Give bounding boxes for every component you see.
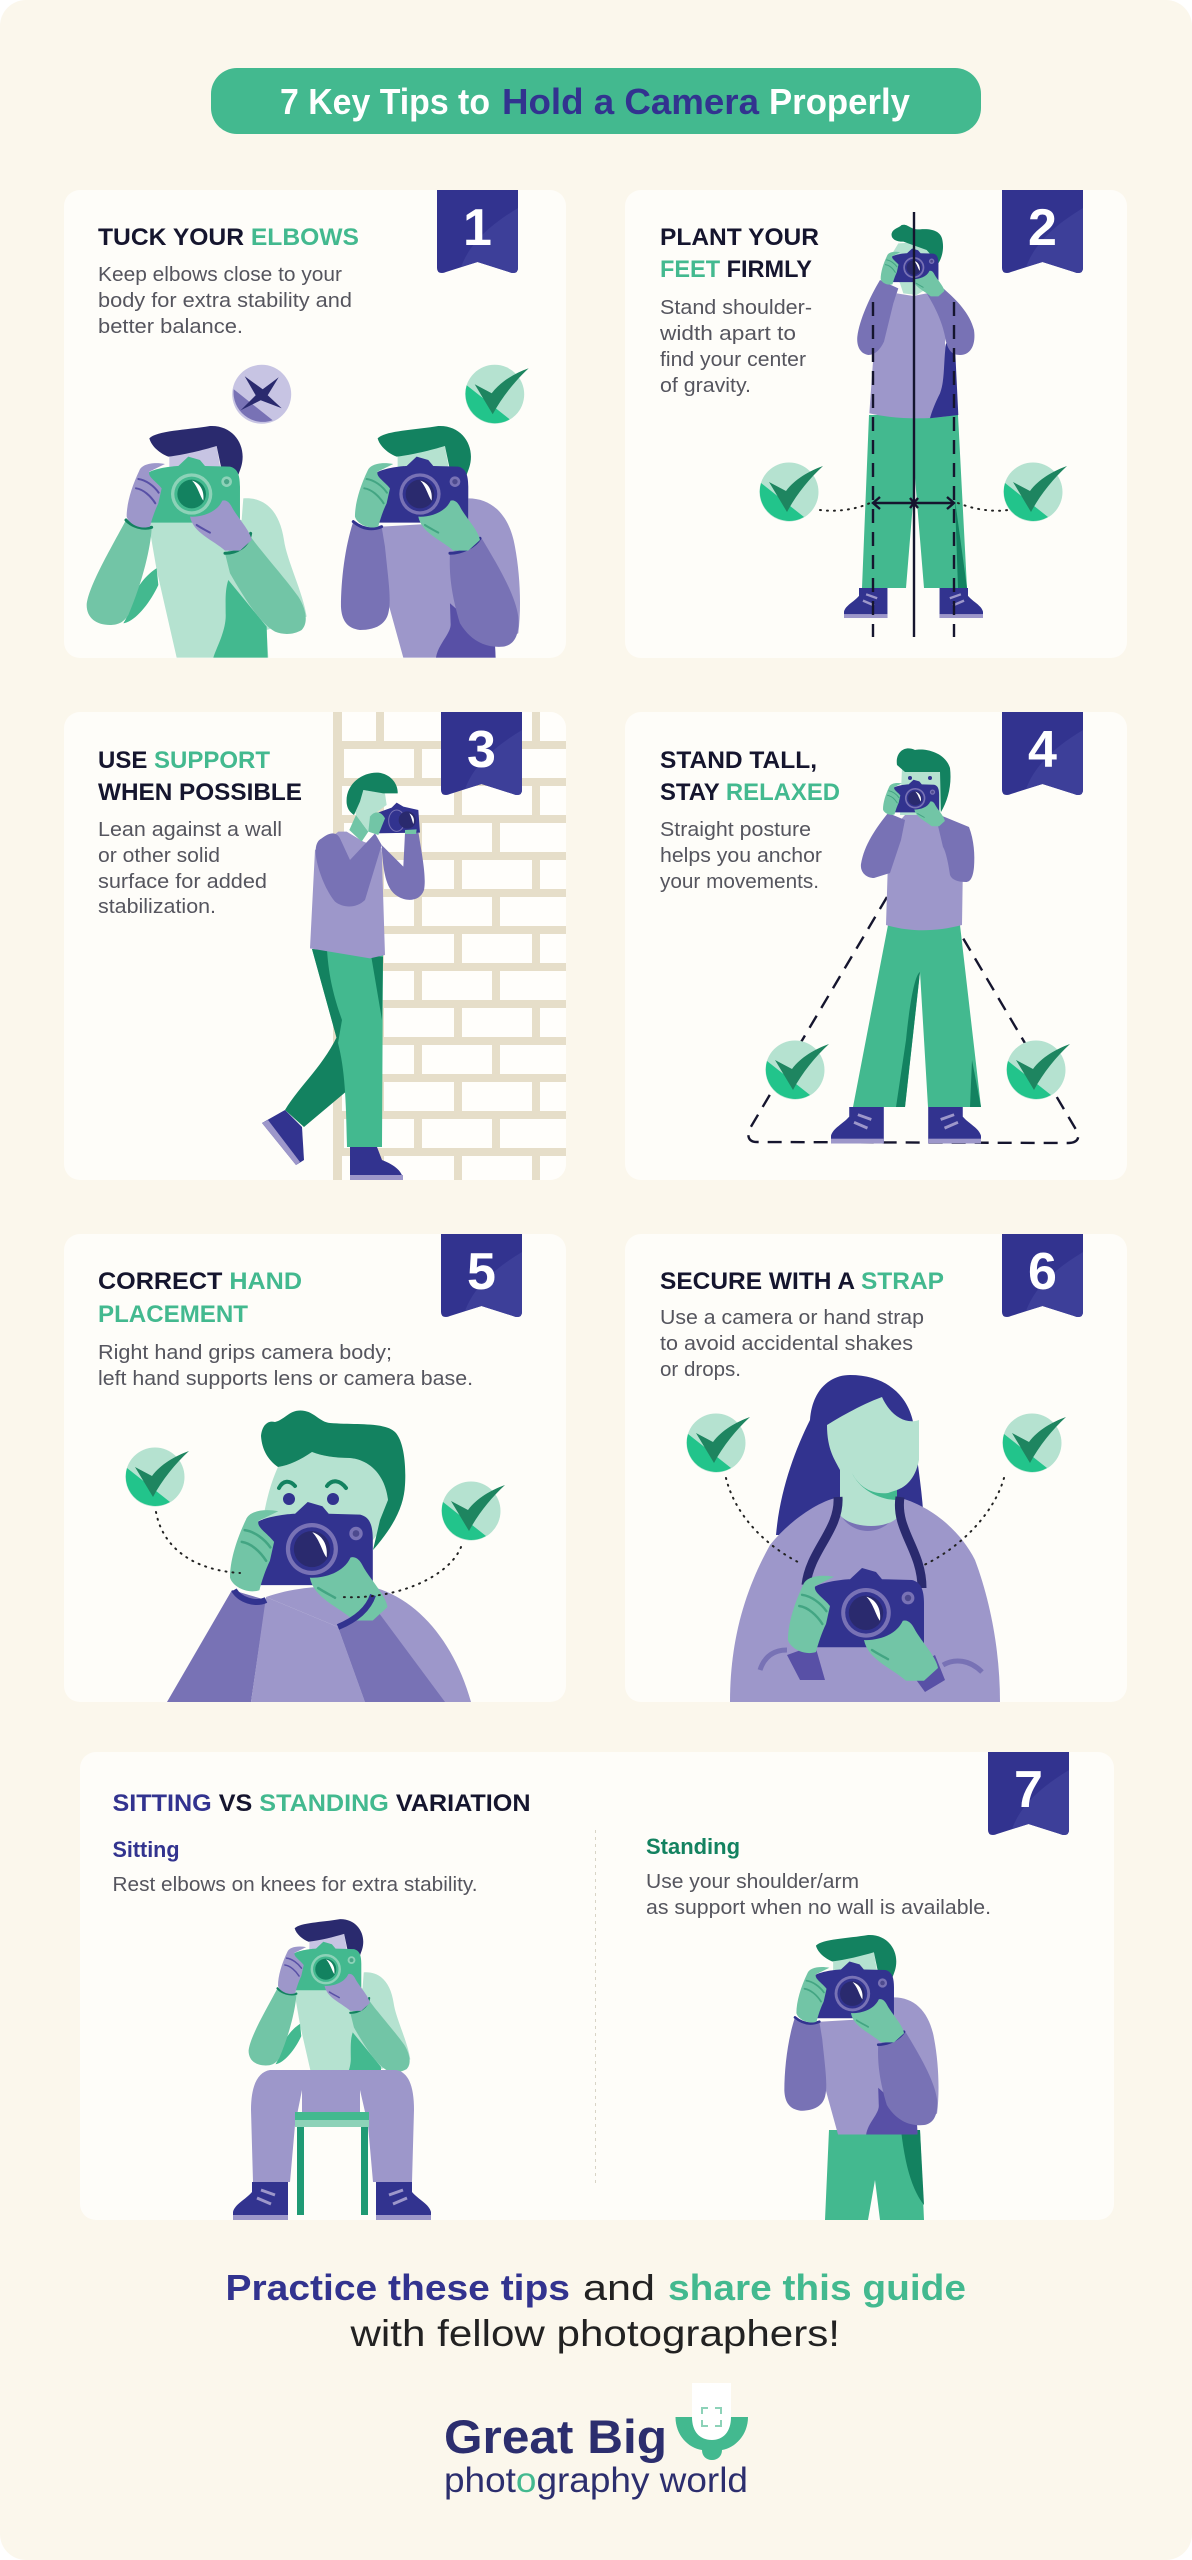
number ribbon 2: 2 <box>1028 199 1057 257</box>
footer call to action: and <box>583 2267 655 2308</box>
heading: PLACEMENT <box>98 1301 248 1328</box>
title banner <box>211 68 981 134</box>
icon: check left <box>760 462 823 522</box>
number ribbon 1: 1 <box>463 199 492 257</box>
sitting column text <box>112 1837 478 1896</box>
footer call to action: Practice these tips <box>226 2267 570 2308</box>
figure: standing front view <box>844 225 983 618</box>
center line and dashed guides <box>873 212 954 637</box>
heading: SITTING VS STANDING VARIATION <box>112 1790 530 1817</box>
dotted connectors <box>726 1478 1004 1565</box>
icon: check mark <box>465 365 529 424</box>
number ribbon 7: 7 <box>1014 1761 1043 1819</box>
icon: check left <box>686 1414 750 1472</box>
icon: check left <box>126 1448 189 1506</box>
number ribbon 6 <box>1002 1234 1083 1317</box>
number ribbon 7 <box>988 1752 1069 1835</box>
heading <box>660 747 840 806</box>
icon: check right <box>1002 1414 1066 1472</box>
body text <box>659 297 812 397</box>
title banner: 7 Key Tips to <box>280 81 490 122</box>
panel: 3 use support <box>64 712 566 1180</box>
heading: STAND TALL, <box>660 747 817 774</box>
logo icon <box>676 2383 748 2460</box>
body text: Right hand grips camera body; <box>98 1342 392 1364</box>
icon: check right <box>1006 1040 1070 1100</box>
body text <box>98 1342 473 1390</box>
heading: USE SUPPORT <box>98 747 270 774</box>
heading: CORRECT HAND <box>98 1268 302 1295</box>
body text: body for extra stability and <box>98 290 352 312</box>
divider <box>594 1830 596 2183</box>
heading <box>660 224 819 283</box>
panel: 2 plant your feet firmly <box>625 190 1127 658</box>
dotted connectors <box>156 1512 461 1597</box>
panel: 4 stand tall <box>625 712 1127 1180</box>
body text: or drops. <box>660 1359 741 1381</box>
number ribbon 1 <box>437 190 518 273</box>
body text: of gravity. <box>660 375 751 397</box>
body text <box>98 264 352 338</box>
figure: sitting on chair <box>233 1919 431 2220</box>
body text: Stand shoulder- <box>660 297 812 319</box>
figure: elbows out, incorrect <box>87 426 307 658</box>
footer call to action: with fellow photographers! <box>349 2313 840 2354</box>
body text: stabilization. <box>98 896 216 918</box>
title banner: Properly <box>769 81 910 122</box>
body text <box>98 819 282 918</box>
icon: cross mark <box>232 365 291 424</box>
standing column text: Use your shoulder/arm <box>646 1871 859 1893</box>
sitting column text: Sitting <box>112 1837 180 1862</box>
number ribbon 3: 3 <box>467 721 496 779</box>
sitting column text: Rest elbows on knees for extra stability. <box>112 1874 478 1896</box>
figure: standing with arm support <box>784 1935 939 2220</box>
number ribbon 5: 5 <box>467 1243 496 1301</box>
heading: FEET FIRMLY <box>660 256 812 283</box>
footer call to action <box>226 2267 966 2354</box>
logo subtitle: photography world <box>444 2461 748 2500</box>
number ribbon 3 <box>441 712 522 795</box>
body text: your movements. <box>660 871 819 893</box>
figure: elbows tucked, correct <box>341 426 520 658</box>
icon: check right <box>1004 462 1067 522</box>
icon: check left <box>766 1040 829 1100</box>
panel: 5 correct hand placement <box>64 1234 566 1702</box>
body text: Keep elbows close to your <box>98 264 342 286</box>
logo <box>444 2383 748 2500</box>
standing column text: Standing <box>646 1834 740 1859</box>
body text: better balance. <box>98 316 243 338</box>
body text: Straight posture <box>660 819 811 841</box>
standing column text: as support when no wall is available. <box>646 1897 991 1919</box>
heading: WHEN POSSIBLE <box>98 779 302 806</box>
number ribbon 4: 4 <box>1028 721 1057 779</box>
figure: standing tall <box>831 748 981 1143</box>
title banner: Hold a Camera <box>502 81 760 122</box>
brick wall <box>333 712 566 1180</box>
heading <box>98 1268 302 1328</box>
number ribbon 2 <box>1002 190 1083 273</box>
heading: SECURE WITH A STRAP <box>660 1268 944 1295</box>
body text <box>660 819 822 893</box>
figure: leaning side view <box>262 773 425 1180</box>
dashed triangle <box>748 897 1078 1143</box>
body text: or other solid <box>98 845 220 867</box>
heading: PLANT YOUR <box>660 224 819 251</box>
figure: woman with strap <box>730 1375 1000 1702</box>
standing column text <box>646 1834 991 1919</box>
panel: 6 secure with a strap <box>625 1234 1127 1702</box>
body text: width apart to <box>659 323 796 345</box>
body text <box>660 1307 924 1381</box>
number ribbon 6: 6 <box>1028 1243 1057 1301</box>
footer call to action: share this guide <box>668 2267 966 2308</box>
icon: check right <box>442 1482 505 1540</box>
body text: Lean against a wall <box>98 819 282 841</box>
figure: close-up hand placement <box>167 1411 471 1702</box>
number ribbon 4 <box>1002 712 1083 795</box>
heading: STAY RELAXED <box>660 779 840 806</box>
body text: left hand supports lens or camera base. <box>98 1368 473 1390</box>
body text: Use a camera or hand strap <box>660 1307 924 1329</box>
dotted connectors <box>820 503 1008 511</box>
heading <box>98 747 302 806</box>
number ribbon 5 <box>441 1234 522 1317</box>
heading: TUCK YOUR ELBOWS <box>98 224 359 251</box>
panel: 1 tuck your elbows <box>64 190 566 658</box>
panel: 7 sitting vs standing <box>80 1752 1114 2220</box>
body text: surface for added <box>98 871 267 893</box>
logo wordmark: Great Big <box>444 2410 667 2463</box>
body text: helps you anchor <box>660 845 822 867</box>
body text: find your center <box>660 349 806 371</box>
body text: to avoid accidental shakes <box>660 1333 913 1355</box>
